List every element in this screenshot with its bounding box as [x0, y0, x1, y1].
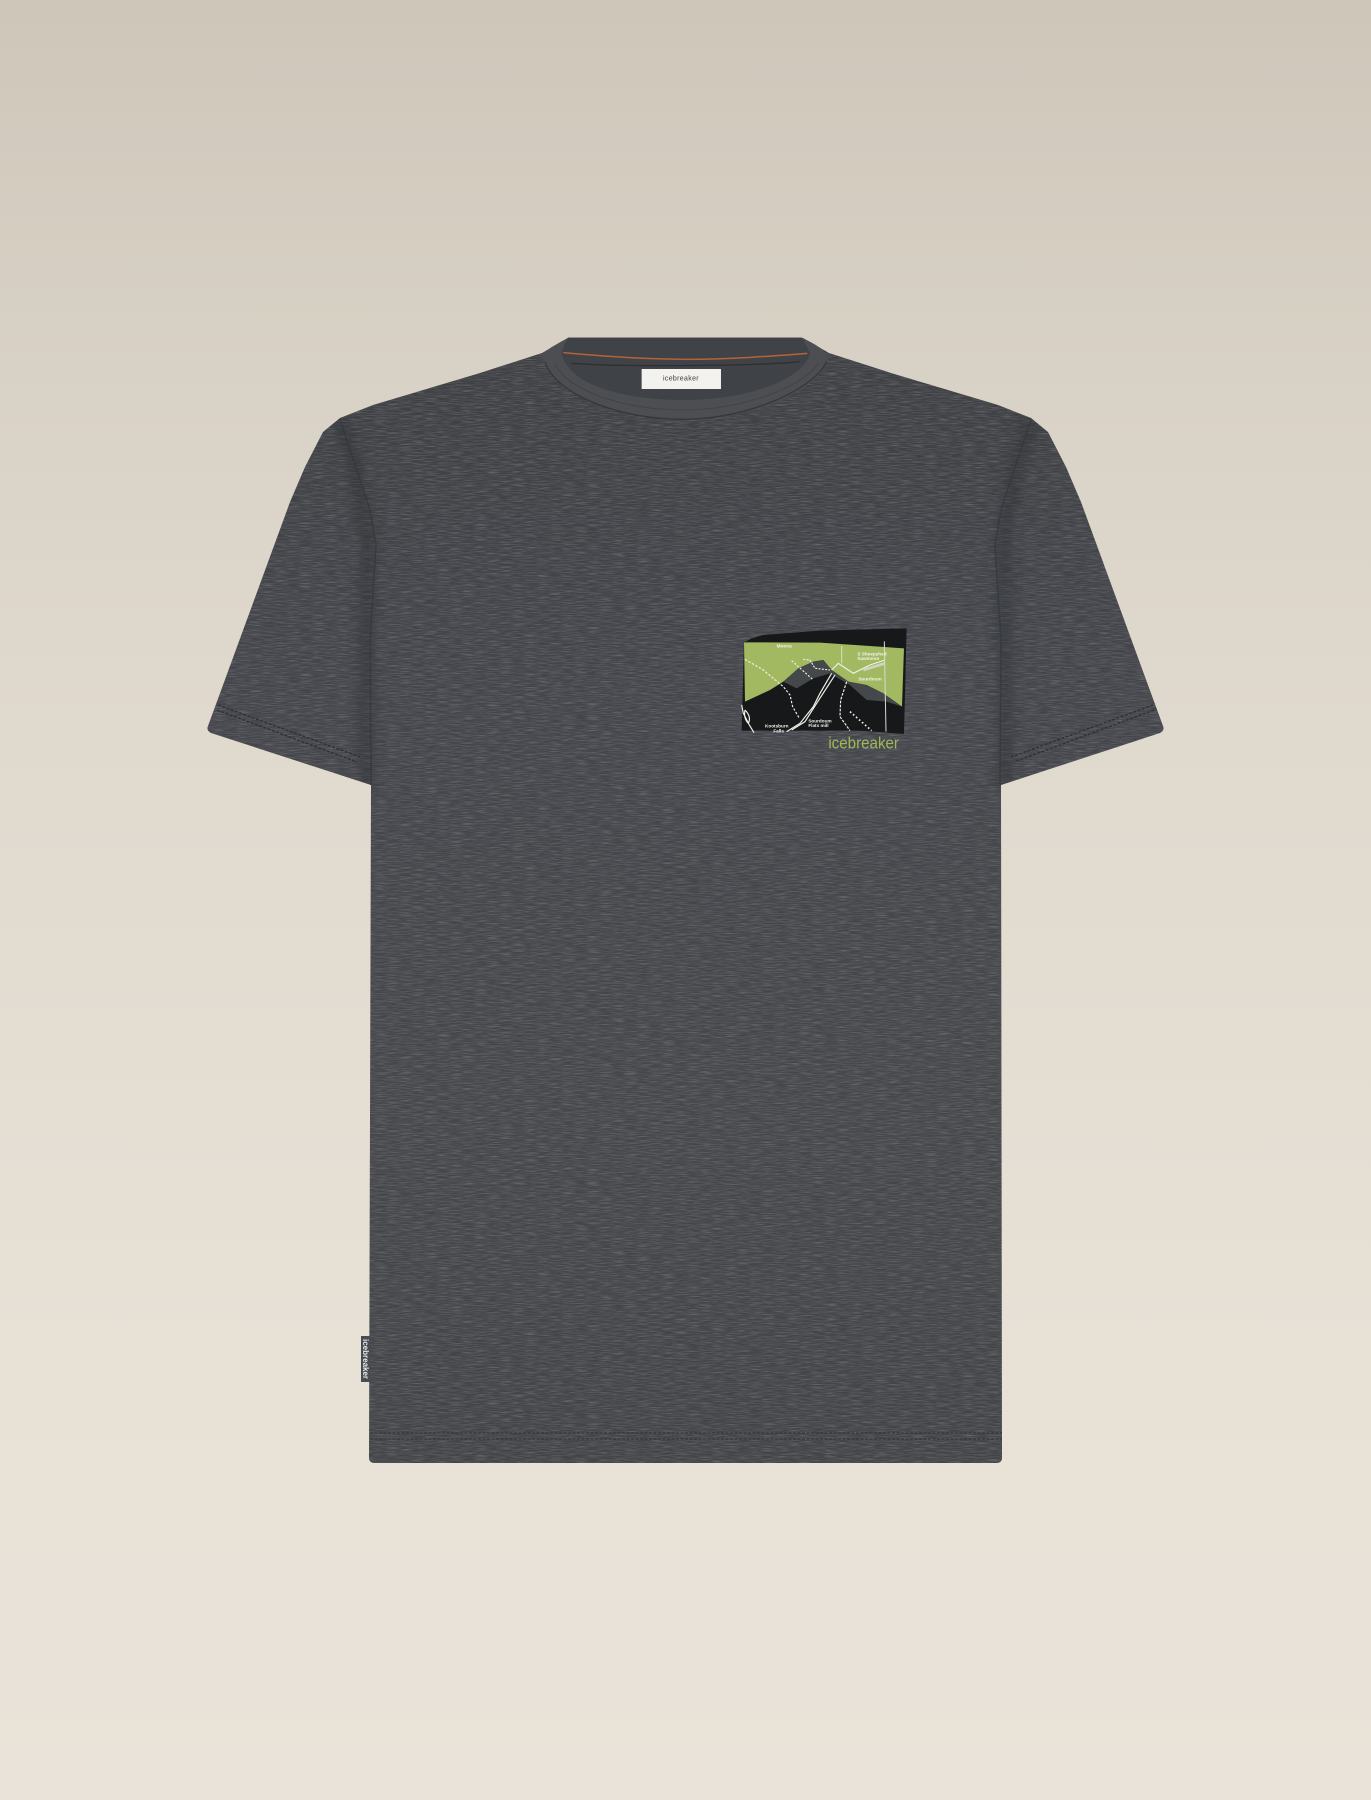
- armhole shading: [340, 420, 1031, 790]
- map labels: S Sheepshed: [857, 651, 887, 656]
- side tag: icebreaker: [361, 1339, 370, 1379]
- seams and stitching: [217, 420, 1154, 1439]
- neck label: icebreaker: [663, 375, 699, 382]
- green map panel: [744, 642, 904, 707]
- map labels: [765, 644, 887, 733]
- black backing: [742, 628, 907, 734]
- map routes: [742, 646, 885, 733]
- collar: [542, 338, 828, 420]
- chest print: [742, 628, 907, 753]
- t-shirt: [200, 330, 1170, 1470]
- map labels: Falls: [773, 728, 784, 733]
- shirt body and sleeves: [207, 338, 1164, 1463]
- map labels: Flats mill: [808, 723, 829, 728]
- grey mountain shading: [783, 660, 902, 707]
- map labels: Moona: [777, 644, 792, 649]
- inner back neck: [562, 338, 810, 400]
- neck label: [642, 369, 721, 389]
- map labels: Sourdoum: [808, 718, 832, 723]
- collar stitch lines: [545, 362, 827, 419]
- map labels: Sawmoon: [857, 656, 879, 661]
- collar band: [542, 338, 828, 420]
- orange neck tape: [563, 353, 807, 359]
- map labels: Sourdoum: [858, 677, 882, 682]
- print logo: icebreaker: [828, 734, 899, 753]
- map labels: Kootsburn: [765, 724, 789, 729]
- fabric heather texture: [200, 330, 1170, 1470]
- vertical white line: [884, 641, 886, 732]
